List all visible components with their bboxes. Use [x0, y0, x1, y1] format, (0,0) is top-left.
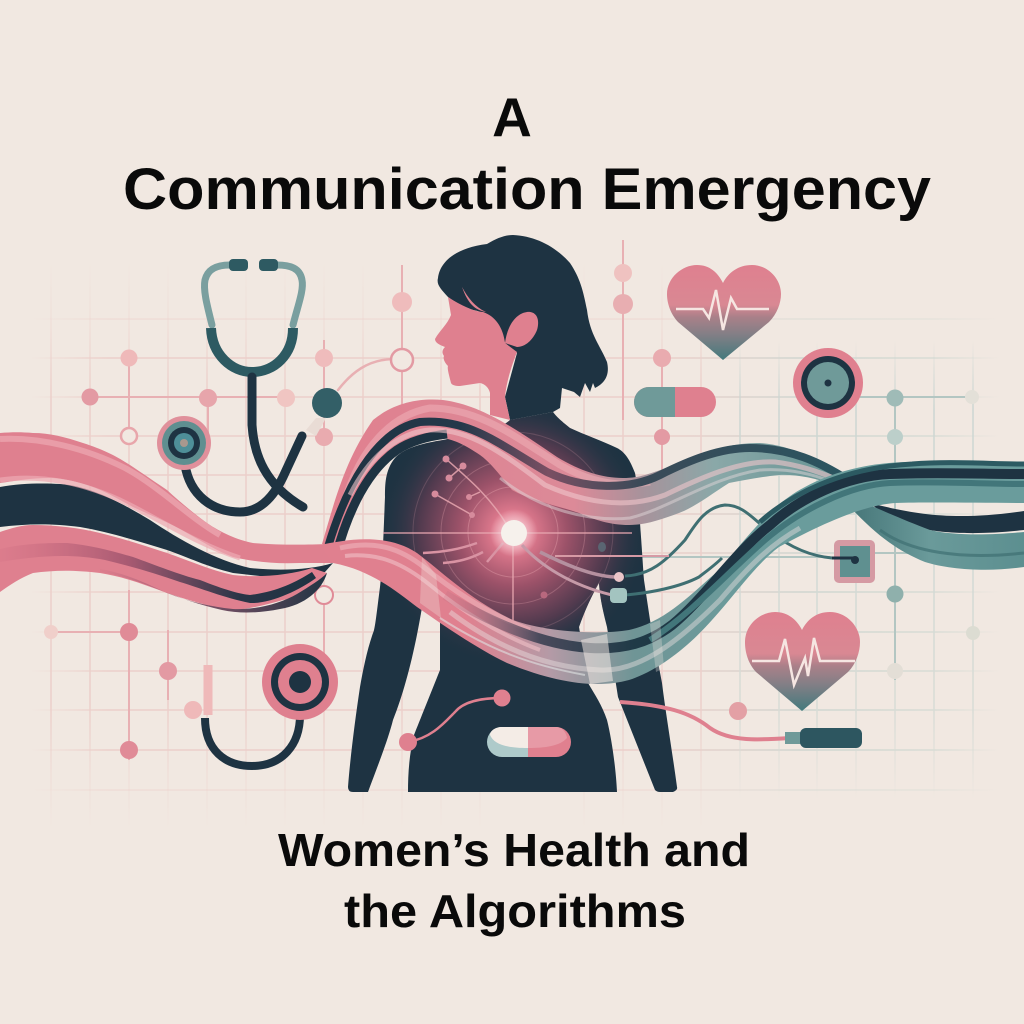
title: Communication Emergency	[123, 157, 931, 222]
square sensor on right	[832, 540, 875, 583]
subtitle: the Algorithms	[344, 885, 686, 937]
grid network: nodes and connector lines	[44, 240, 1000, 760]
right ribbon: dark band and teal band	[835, 490, 1024, 570]
subtitle	[278, 824, 750, 937]
icon: pill on body with wire	[399, 690, 571, 757]
left ribbons flowing in from the edge	[0, 432, 333, 613]
title: A	[492, 86, 532, 148]
icon: heart top right	[667, 265, 781, 360]
icon: stethoscope top left	[157, 259, 413, 512]
lower main ribbon	[320, 461, 1024, 684]
upper ribbon arcing over the shoulder	[322, 400, 848, 556]
title	[123, 86, 931, 222]
icon: target disc right	[793, 348, 863, 418]
icon: pill top right	[634, 387, 716, 417]
thin wires with sensor beads	[522, 505, 832, 603]
icon: heart lower right	[745, 612, 860, 711]
icon: probe cable	[620, 702, 862, 748]
subtitle: Women’s Health and	[278, 824, 750, 876]
icon: stethoscope lower left	[205, 644, 338, 766]
glowing central node with radial network	[383, 432, 632, 632]
woman silhouette	[348, 235, 677, 792]
